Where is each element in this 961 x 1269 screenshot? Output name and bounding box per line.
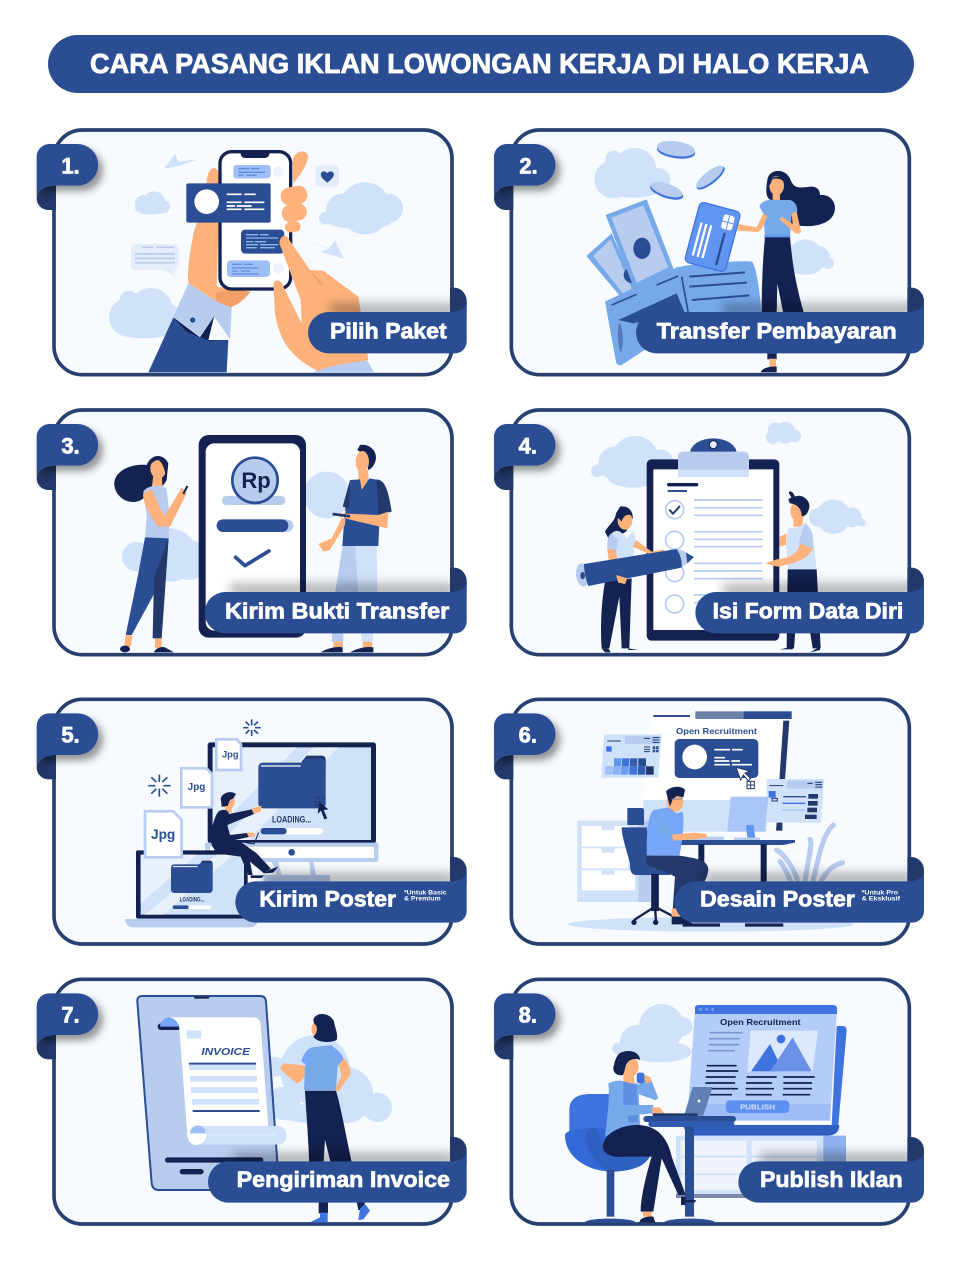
label: Kirim Poster: Kirim Poster [259,886,396,911]
label: Desain Poster: Desain Poster [700,886,855,911]
title banner [48,35,914,93]
panel: step 2 Transfer Pembayaran [494,130,924,375]
label: Pilih Paket [308,301,467,353]
label: Desain Poster [675,870,924,923]
badge: number 7: 7. [61,1003,80,1028]
panel: step 4 Isi Form Data Diri [494,410,924,655]
label: Pengiriman Invoice [208,1150,467,1203]
badge: number 6: 6. [519,723,537,748]
panel: step 6 Desain Poster [494,699,924,944]
badge: number 8 [494,993,555,1048]
label: Transfer Pembayaran: Transfer Pembayaran [657,318,897,343]
illustration: uploading files on monitor and laptop [125,719,378,927]
illustration: woman publishing job ad on laptop: PUBLISH [740,1103,775,1112]
label: Kirim Bukti Transfer: Kirim Bukti Transfer [225,598,450,623]
illustration: uploading files on monitor and laptop: Jpg [222,749,239,759]
label: Kirim Poster: *Untuk Basic [404,890,447,897]
illustration: uploading files on monitor and laptop: LOADING... [272,814,311,824]
badge: number 6 [494,713,555,768]
badge: number 2: 2. [519,153,538,178]
badge: number 5: 5. [61,723,80,748]
illustration: invoice on tablet and woman: INVOICE [201,1047,251,1058]
illustration: payment proof phone and two people: Rp [241,468,271,493]
illustration: invoice on tablet and woman [137,996,392,1222]
label: Publish Iklan: Publish Iklan [760,1167,903,1192]
label: Desain Poster: *Untuk Pro [862,890,898,897]
label: Pilih Paket: Pilih Paket [330,318,447,343]
panel: step 5 Kirim Poster [37,699,467,944]
illustration: woman publishing job ad on laptop: Open Recruitment [720,1017,801,1027]
badge: number 7 [37,993,98,1048]
badge: number 4 [494,424,555,478]
illustration: hands holding phone [109,151,403,372]
badge: number 3 [37,424,98,478]
illustration: clipboard form with two people [574,422,866,652]
illustration: woman publishing job ad on laptop [565,1004,847,1222]
title banner: CARA PASANG IKLAN LOWONGAN KERJA DI HALO KERJA [90,48,869,79]
label: Isi Form Data Diri [695,581,924,633]
illustration: uploading files on monitor and laptop: Jpg [151,827,175,842]
badge: number 8: 8. [519,1003,537,1028]
illustration: uploading files on monitor and laptop: LOADING... [180,898,205,904]
panel: step 3 Kirim Bukti Transfer [37,410,467,655]
badge: number 3: 3. [61,433,80,458]
illustration: designer at desk with poster window [568,711,853,932]
illustration: uploading files on monitor and laptop: Jpg [188,782,205,793]
label: Kirim Poster: & Premium [404,896,441,903]
label: Publish Iklan [738,1150,924,1203]
badge: number 1 [37,144,98,198]
label: Desain Poster: & Eksklusif [862,896,901,903]
illustration: designer at desk with poster window: Open Recruitment [676,726,757,736]
label: Transfer Pembayaran [636,301,924,353]
label: Pengiriman Invoice: Pengiriman Invoice [237,1167,450,1192]
label: Isi Form Data Diri: Isi Form Data Diri [713,598,903,623]
badge: number 1: 1. [61,153,80,178]
panel: step 8 Publish Iklan [494,979,924,1224]
badge: number 5 [37,713,98,768]
label: Kirim Poster [235,870,467,923]
label: Kirim Bukti Transfer [205,581,467,633]
panel: step 1 Pilih Paket [37,130,467,375]
illustration: wallet, card and woman [586,139,835,372]
illustration: payment proof phone and two people [114,435,392,652]
panel: step 7 Pengiriman Invoice [37,979,467,1224]
badge: number 4: 4. [519,433,537,458]
badge: number 2 [494,144,555,198]
